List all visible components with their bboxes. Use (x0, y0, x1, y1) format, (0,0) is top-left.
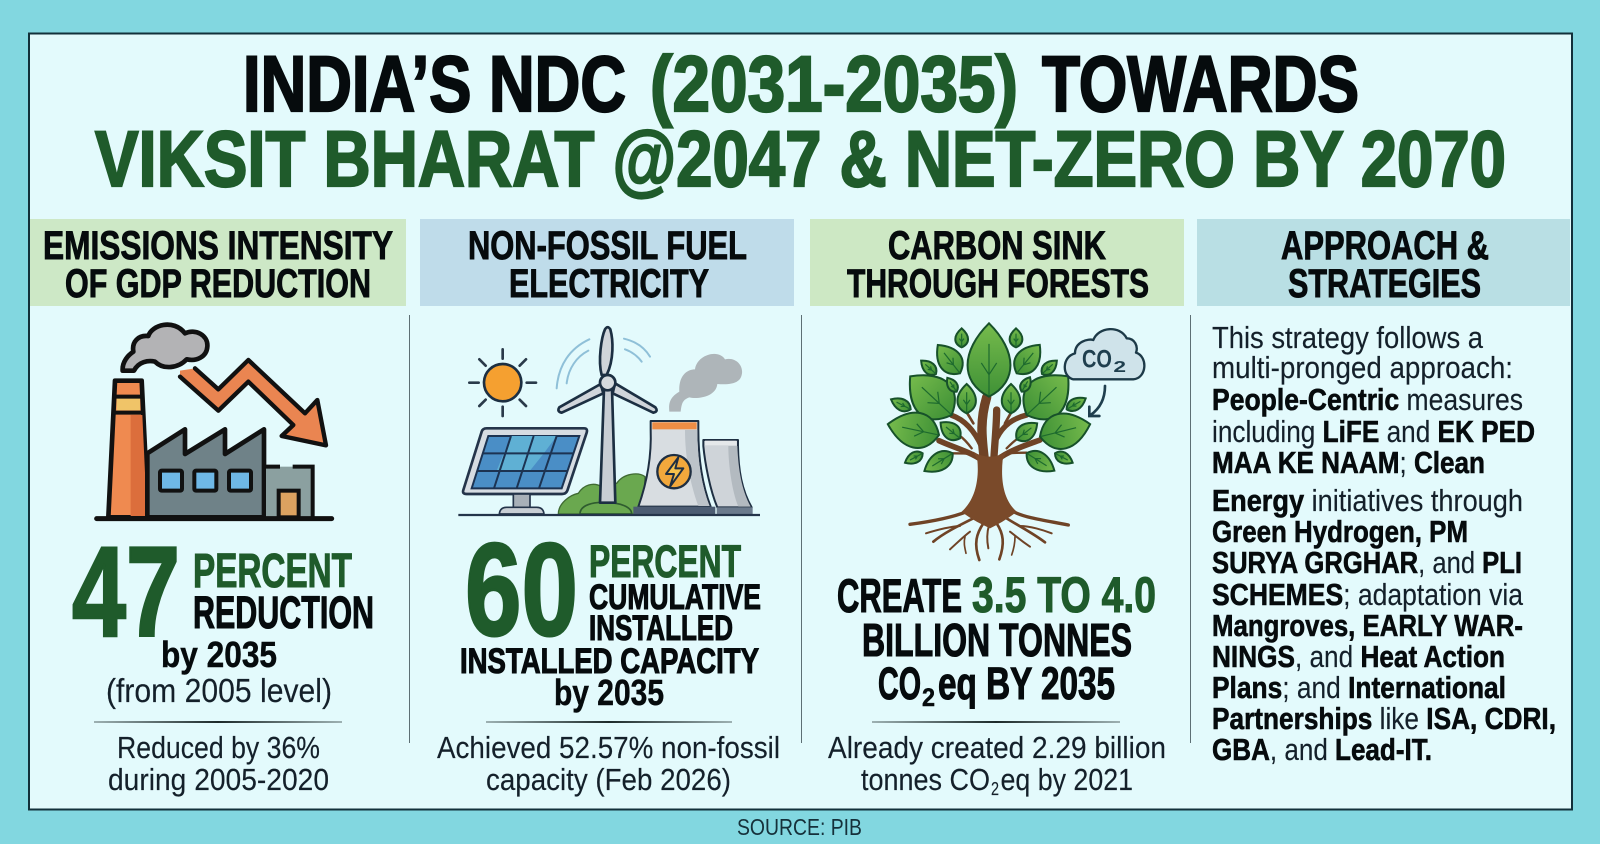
label: by 2035: by 2035 (554, 672, 664, 713)
text block: strategy description: This strategy follows a (1212, 320, 1484, 355)
panel: approach and strategies (1197, 219, 1570, 767)
text block: strategy description: SURYA GRGHAR, and PLI (1212, 545, 1522, 580)
icon: factory with falling arrow (97, 325, 332, 519)
text block: strategy description: GBA, and Lead-IT. (1212, 732, 1432, 767)
target: create 3.5 to 4.0 billion tonnes: CO (878, 658, 921, 709)
label: by 2035: by 2035 (161, 634, 277, 675)
heading: approach and strategies (1197, 219, 1570, 306)
label: reduction: REDUCTION (193, 587, 374, 638)
note: already created (828, 730, 1166, 799)
note: progress 36 percent: during 2005-2020 (108, 762, 329, 797)
target: create 3.5 to 4.0 billion tonnes: 3.5 TO 4.0 (972, 567, 1156, 623)
text block: strategy description: including LiFE and EK PED (1212, 414, 1535, 449)
heading: emissions intensity of GDP reduction: OF GDP REDUCTION (65, 262, 371, 306)
divider rule (94, 721, 342, 723)
target: create 3.5 to 4.0 billion tonnes: eq BY 2035 (938, 658, 1115, 709)
heading: carbon sink through forests: CARBON SINK (888, 224, 1106, 268)
title: TOWARDS (1042, 39, 1359, 128)
source note: SOURCE: PIB (737, 814, 862, 840)
heading: approach and strategies: STRATEGIES (1288, 262, 1481, 306)
panel: carbon sink through forests (810, 219, 1184, 799)
panel: non-fossil fuel electricity (420, 219, 794, 797)
note: already created: 2 (991, 779, 999, 799)
column divider lines (410, 315, 1190, 743)
label: cumulative: CUMULATIVE (589, 578, 761, 617)
target: create 3.5 to 4.0 billion tonnes: 2 (922, 684, 935, 712)
text block: strategy description: MAA KE NAAM; Clean (1212, 445, 1485, 480)
note: progress 36 percent: Reduced by 36% (117, 730, 320, 765)
text block: strategy description (1212, 320, 1556, 767)
text block: strategy description: Mangroves, EARLY WAR- (1212, 608, 1523, 643)
heading: emissions intensity of GDP reduction (30, 219, 406, 306)
label: percent: PERCENT (589, 536, 741, 587)
label: percent: PERCENT (193, 545, 352, 598)
big number 60: 60 (465, 516, 578, 663)
heading: non-fossil fuel electricity: ELECTRICITY (509, 262, 709, 306)
icon: tree absorbing CO2: CO (1082, 345, 1112, 373)
target: create 3.5 to 4.0 billion tonnes: BILLION TONNES (862, 614, 1132, 666)
text block: strategy description: Plans; and International (1212, 670, 1506, 705)
label: installed: INSTALLED (589, 609, 733, 648)
icon: sun, solar panel, wind turbine and nuclear plant (458, 327, 760, 515)
note: already created: eq by 2021 (1000, 762, 1133, 797)
note: achieved capacity: capacity (Feb 2026) (486, 762, 731, 797)
target: create 3.5 to 4.0 billion tonnes: CREATE (837, 569, 962, 622)
note: achieved capacity (437, 730, 780, 797)
note: progress 36 percent (108, 730, 329, 797)
icon: tree absorbing CO2 (884, 323, 1144, 560)
heading: non-fossil fuel electricity: NON-FOSSIL FUEL (468, 224, 747, 268)
divider rule (872, 721, 1120, 723)
title: (2031-2035) (650, 39, 1018, 128)
big number 47: 47 (72, 521, 180, 664)
title (95, 39, 1506, 203)
heading: emissions intensity of GDP reduction: EMISSIONS INTENSITY (43, 224, 393, 268)
text block: strategy description: SCHEMES; adaptation via (1212, 577, 1524, 612)
text block: strategy description: People-Centric measures (1212, 382, 1523, 417)
text block: strategy description: Partnerships like ISA, CDRI, (1212, 701, 1556, 736)
divider rule (486, 721, 732, 723)
text block: strategy description: Energy initiatives through (1212, 483, 1523, 518)
heading: approach and strategies: APPROACH & (1281, 224, 1489, 268)
panel: emissions intensity (30, 219, 406, 797)
note: already created: Already created 2.29 billion (828, 730, 1166, 765)
label: installed capacity: INSTALLED CAPACITY (460, 642, 759, 681)
note: already created: tonnes CO (861, 762, 990, 797)
heading: carbon sink through forests: THROUGH FORESTS (847, 262, 1149, 306)
text block: strategy description: Green Hydrogen, PM (1212, 514, 1468, 549)
icon: tree absorbing CO2: 2 (1113, 359, 1126, 376)
title: INDIA’S NDC (243, 39, 626, 128)
heading: carbon sink through forests (810, 219, 1184, 306)
target: create 3.5 to 4.0 billion tonnes (837, 567, 1156, 712)
note: achieved capacity: Achieved 52.57% non-fossil (437, 730, 780, 765)
text block: strategy description: multi-pronged approach: (1212, 350, 1513, 385)
text block: strategy description: NINGS, and Heat Action (1212, 639, 1505, 674)
label: from 2005 level: (from 2005 level) (106, 672, 332, 709)
heading: non-fossil fuel electricity (420, 219, 794, 306)
